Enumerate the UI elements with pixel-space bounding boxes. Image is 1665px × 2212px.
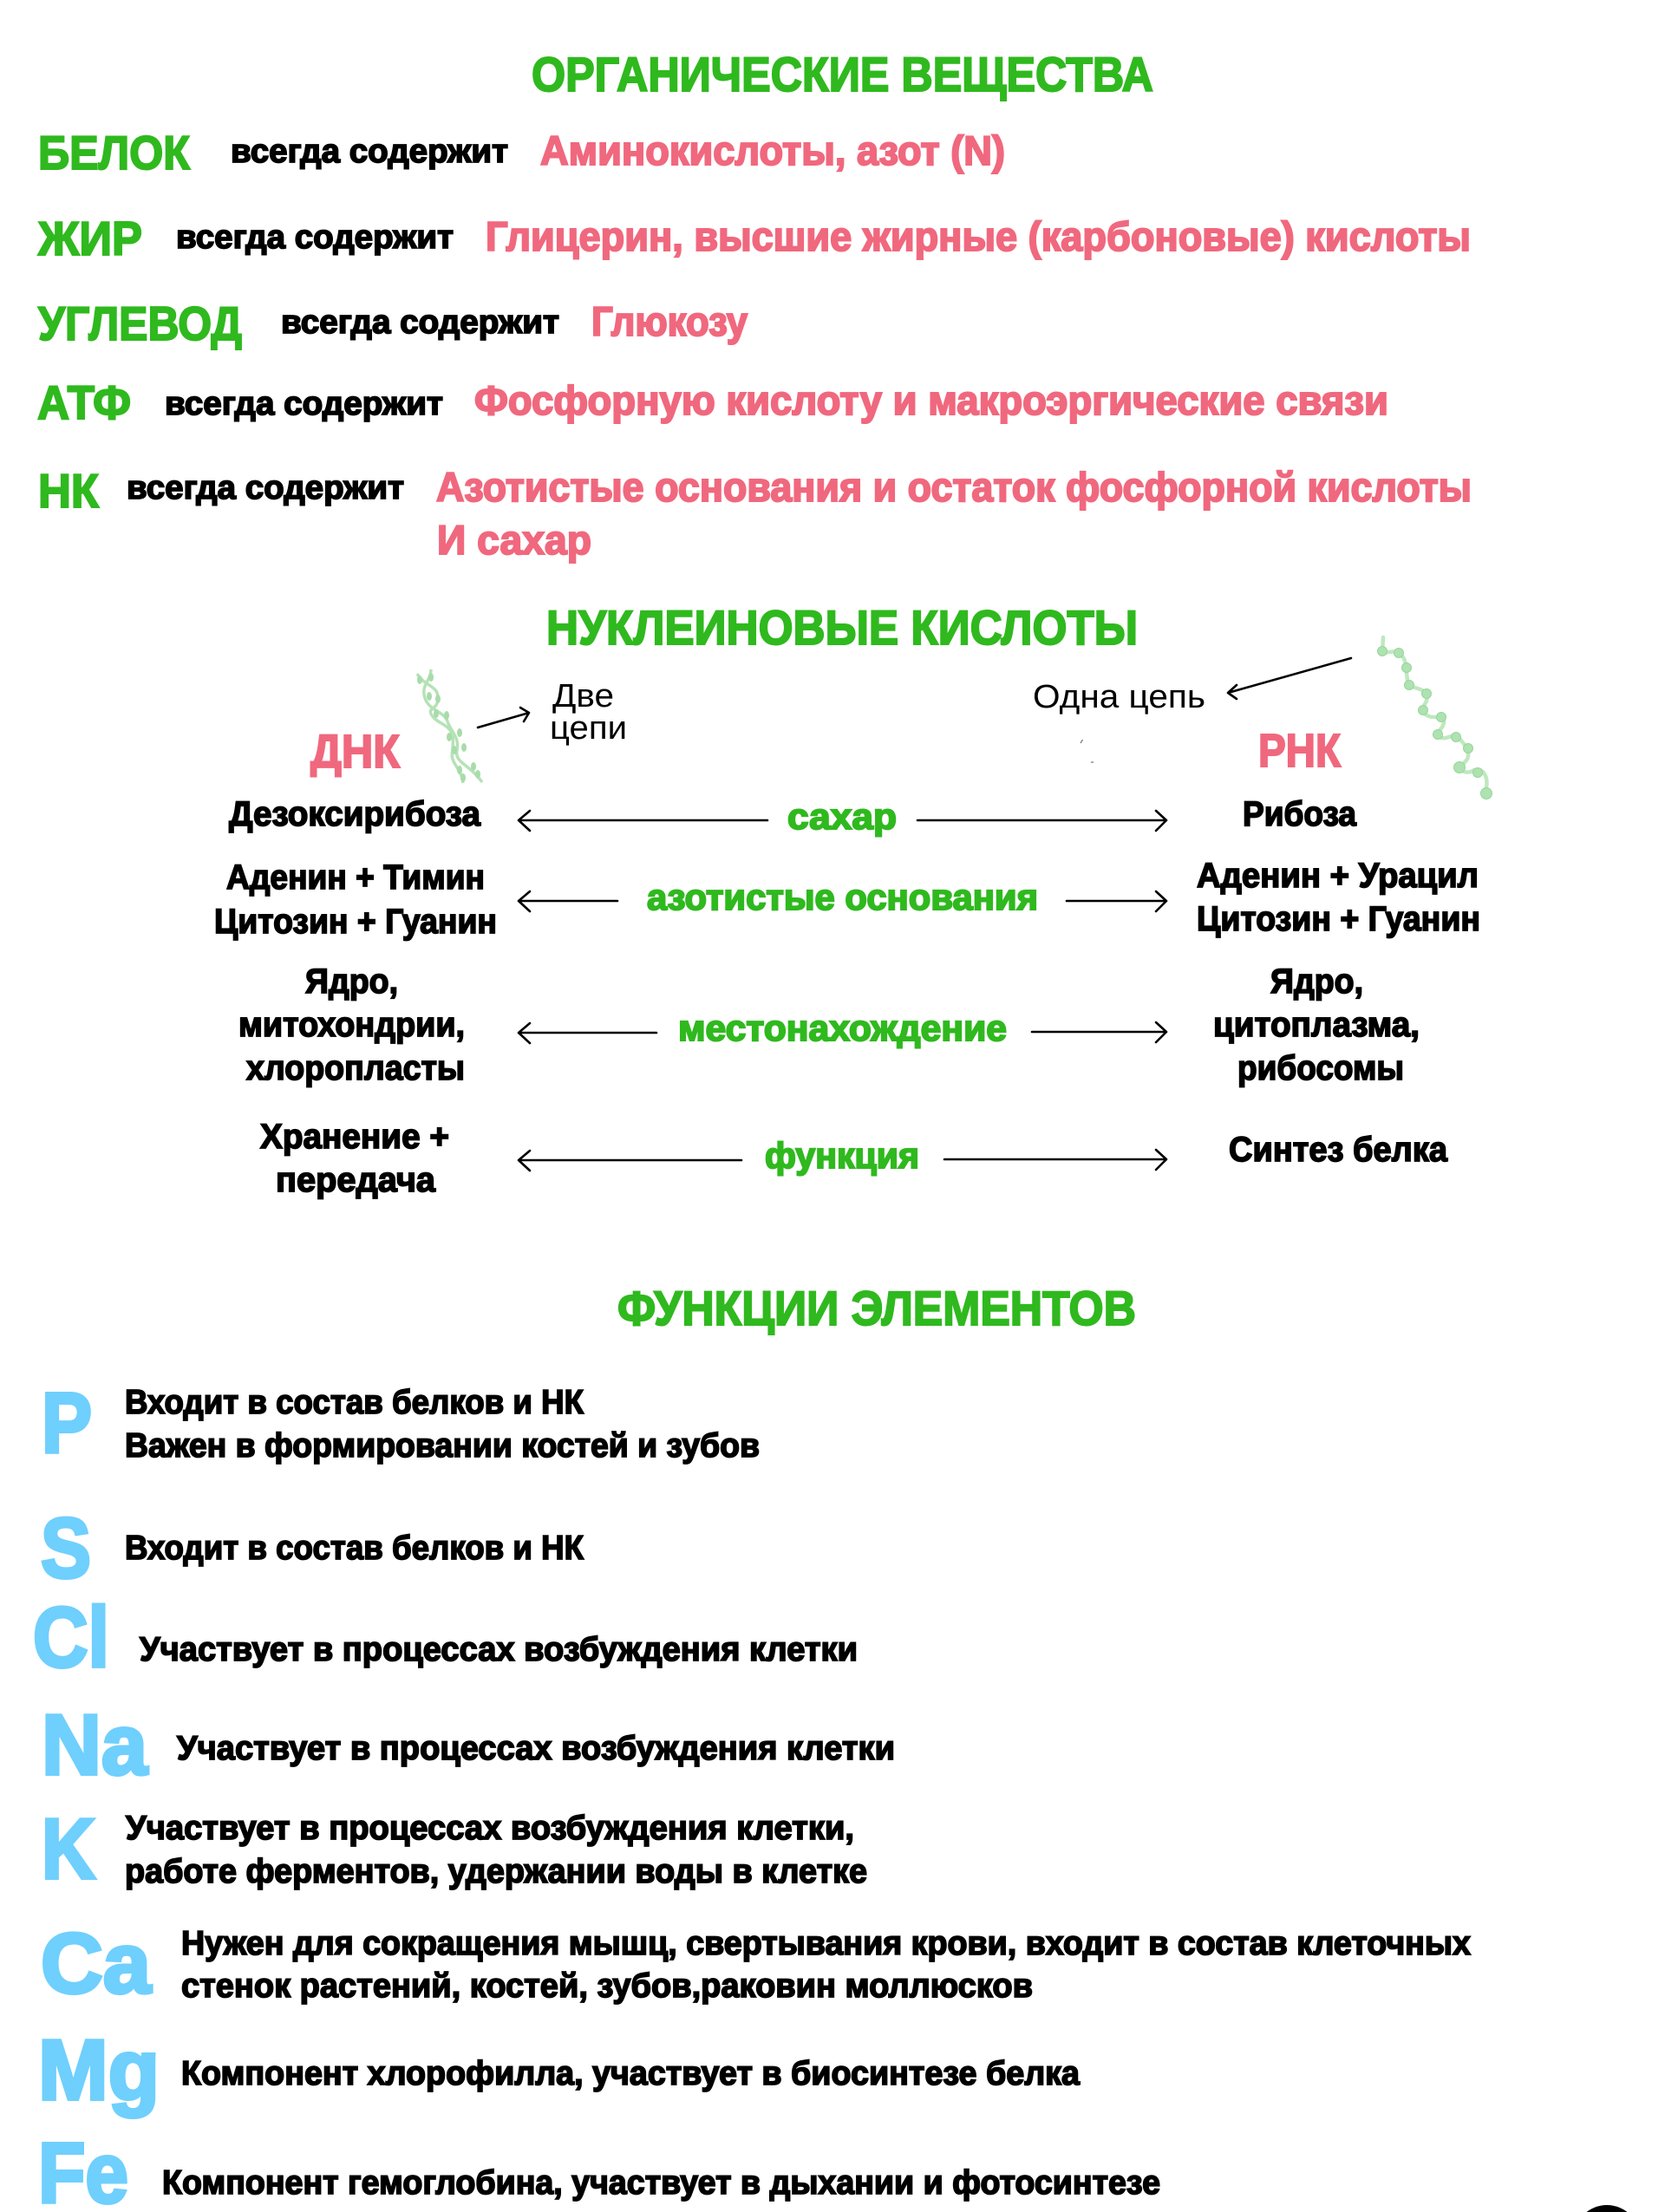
row: chlorine: Участвует в процессах возбуждения клетки bbox=[140, 1631, 858, 1668]
row: fat: Глицерин, высшие жирные (карбоновые) кислоты bbox=[486, 213, 1471, 259]
row: sugar: Рибоза bbox=[1243, 795, 1357, 833]
heading: RNA: РНК bbox=[1258, 725, 1342, 777]
row: location: рибосомы bbox=[1237, 1049, 1404, 1087]
row: phosphorus bbox=[42, 1375, 760, 1471]
row: potassium: K bbox=[42, 1801, 95, 1896]
row: nucleic acids: Азотистые основания и остаток фосфорной кислоты bbox=[436, 464, 1472, 510]
row: phosphorus: P bbox=[42, 1375, 92, 1471]
panel: organic substances bbox=[37, 47, 1472, 563]
row: magnesium bbox=[38, 2022, 1080, 2117]
row: location bbox=[238, 962, 1420, 1087]
label: one strand: Одна цепь bbox=[1033, 679, 1205, 715]
row: phosphorus: Важен в формировании костей и зубов bbox=[125, 1427, 760, 1465]
arrow: RNA icon to one strand label bbox=[1228, 658, 1351, 699]
row: function: Синтез белка bbox=[1229, 1131, 1448, 1169]
row: nitrogen bases: Цитозин + Гуанин bbox=[1197, 900, 1480, 938]
row: fat: ЖИР bbox=[37, 212, 142, 265]
row: sodium: Na bbox=[42, 1697, 148, 1792]
row: carbohydrate: Глюкозу bbox=[591, 298, 748, 344]
row: sulfur: S bbox=[41, 1500, 91, 1595]
row: nucleic acids: И сахар bbox=[437, 517, 591, 563]
row: carbohydrate: УГЛЕВОД bbox=[38, 297, 242, 350]
row: sugar bbox=[229, 795, 1357, 837]
row: calcium bbox=[41, 1915, 1471, 2011]
icon: DNA double helix bbox=[417, 669, 482, 783]
row: potassium: Участвует в процессах возбуждения клетки, bbox=[126, 1810, 854, 1847]
row: ATP: АТФ bbox=[37, 375, 131, 429]
row: protein: Аминокислоты, азот (N) bbox=[540, 127, 1005, 173]
row: iron bbox=[38, 2125, 1160, 2212]
row: chlorine: Cl bbox=[33, 1589, 109, 1685]
row: potassium bbox=[42, 1801, 867, 1896]
row: carbohydrate: всегда содержит bbox=[281, 304, 559, 341]
row: protein bbox=[38, 126, 1005, 179]
row: location: хлоропласты bbox=[246, 1049, 465, 1087]
row: nitrogen bases: азотистые основания bbox=[647, 877, 1038, 917]
row: ATP: всегда содержит bbox=[165, 386, 443, 422]
row: iron: Компонент гемоглобина, участвует в дыхании и фотосинтезе bbox=[162, 2164, 1160, 2202]
row: sulfur: Входит в состав белков и НК bbox=[125, 1530, 584, 1567]
icon: cropped black mark at bottom right bbox=[1574, 2205, 1640, 2212]
row: nitrogen bases: Цитозин + Гуанин bbox=[214, 903, 497, 941]
row: carbohydrate bbox=[38, 297, 748, 350]
row: phosphorus: Входит в состав белков и НК bbox=[125, 1384, 584, 1421]
row: location: цитоплазма, bbox=[1213, 1006, 1420, 1044]
row: nucleic acids: всегда содержит bbox=[127, 470, 404, 506]
row: sugar: сахар bbox=[787, 796, 897, 837]
row: fat bbox=[37, 212, 1471, 265]
label: two strands: цепи bbox=[550, 710, 627, 747]
row: calcium: Ca bbox=[41, 1915, 153, 2011]
row: protein: БЕЛОК bbox=[38, 126, 190, 179]
row: location: Ядро, bbox=[1270, 962, 1363, 1001]
row: location: местонахождение bbox=[678, 1008, 1007, 1048]
row: protein: всегда содержит bbox=[231, 134, 508, 170]
row: magnesium: Компонент хлорофилла, участвует в биосинтезе белка bbox=[181, 2055, 1080, 2092]
row: calcium: стенок растений, костей, зубов,раковин моллюсков bbox=[181, 1967, 1033, 2005]
title: nucleic acids: НУКЛЕИНОВЫЕ КИСЛОТЫ bbox=[546, 600, 1138, 655]
row: nitrogen bases: Аденин + Тимин bbox=[226, 858, 485, 897]
row: calcium: Нужен для сокращения мышц, свертывания крови, входит в состав клеточных bbox=[181, 1925, 1471, 1962]
row: magnesium: Mg bbox=[38, 2022, 160, 2117]
row: nitrogen bases bbox=[214, 857, 1480, 941]
row: function: передача bbox=[276, 1161, 436, 1199]
row: ATP: Фосфорную кислоту и макроэргические связи bbox=[474, 377, 1388, 423]
title: organic substances: ОРГАНИЧЕСКИЕ ВЕЩЕСТВА bbox=[532, 47, 1153, 101]
icon: RNA single strand bbox=[1377, 637, 1492, 799]
row: sodium bbox=[42, 1697, 895, 1792]
panel: nucleic acids bbox=[214, 600, 1492, 1199]
row: function: функция bbox=[765, 1135, 919, 1176]
row: function bbox=[260, 1118, 1448, 1199]
row: sugar: Дезоксирибоза bbox=[229, 795, 481, 833]
title: element functions: ФУНКЦИИ ЭЛЕМЕНТОВ bbox=[617, 1281, 1136, 1335]
heading: DNA: ДНК bbox=[310, 726, 401, 778]
row: nitrogen bases: Аденин + Урацил bbox=[1197, 857, 1479, 895]
label: two strands bbox=[550, 678, 627, 747]
panel: element functions bbox=[33, 1281, 1471, 2212]
row: chlorine bbox=[33, 1589, 858, 1685]
row: fat: всегда содержит bbox=[176, 219, 454, 256]
label: two strands: Две bbox=[552, 678, 614, 714]
row: potassium: работе ферментов, удержании воды в клетке bbox=[125, 1853, 867, 1890]
arrow: DNA icon to two strands label bbox=[478, 708, 529, 728]
row: nucleic acids bbox=[38, 464, 1472, 563]
row: function: Хранение + bbox=[260, 1118, 449, 1156]
row: sulfur bbox=[41, 1500, 584, 1595]
row: location: Ядро, bbox=[305, 962, 398, 1001]
row: nucleic acids: НК bbox=[38, 464, 99, 518]
row: sodium: Участвует в процессах возбуждения клетки bbox=[177, 1730, 895, 1767]
row: location: митохондрии, bbox=[238, 1006, 465, 1044]
row: ATP bbox=[37, 375, 1388, 429]
